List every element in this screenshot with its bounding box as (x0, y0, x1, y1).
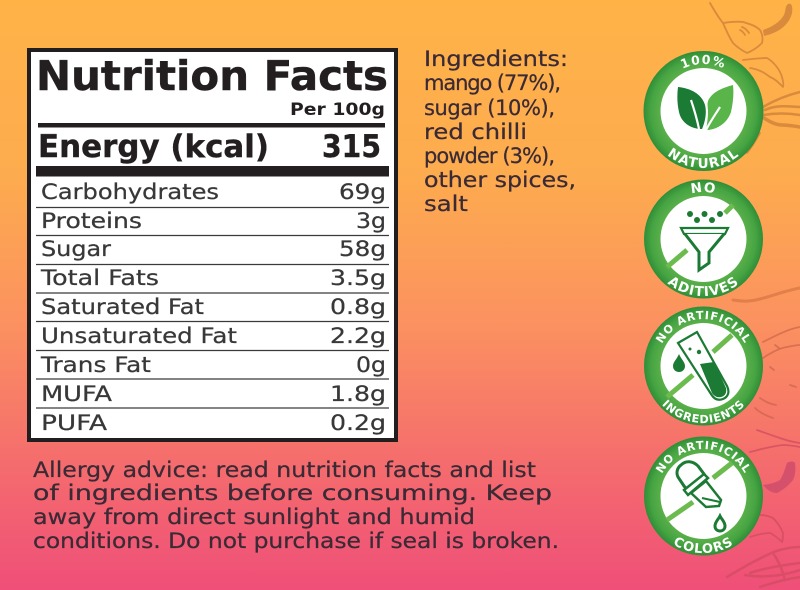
row: total fats: 3.5g (330, 266, 386, 290)
row: saturated fat (41, 295, 386, 319)
row: saturated fat: Saturated Fat (41, 295, 204, 319)
ingredients text block: other spices, (424, 168, 576, 192)
icon: funnel (681, 211, 728, 270)
row: trans fat: Trans Fat (40, 353, 151, 377)
row: sugar: Sugar (41, 237, 111, 261)
slash (667, 463, 732, 520)
ingredients text block: Ingredients: (424, 47, 568, 71)
row: proteins: Proteins (41, 209, 142, 233)
panel background (29, 50, 396, 440)
row: pufa: 0.2g (330, 411, 386, 435)
badge label: ADITIVES (667, 276, 738, 296)
icon: leaves (677, 85, 733, 130)
ingredients text block: salt (424, 192, 468, 216)
row: mufa: 1.8g (330, 382, 386, 406)
row: carbohydrates (41, 180, 386, 204)
row: proteins (41, 209, 386, 233)
row: sugar: 58g (339, 237, 386, 261)
row: mufa (41, 382, 386, 406)
row: trans fat (40, 353, 386, 377)
allergy advice text block: conditions. Do not purchase if seal is broken. (33, 529, 559, 553)
badge: no artificial colors (644, 436, 763, 556)
energy row (38, 129, 381, 165)
badge label: INGREDIENTS (662, 400, 744, 424)
serving size: Per 100g (290, 100, 385, 119)
row: total fats: Total Fats (40, 266, 159, 290)
badge label: NO ARTIFICIAL (656, 440, 750, 473)
row: unsaturated fat (41, 324, 386, 348)
ingredients text block: powder (3%), (424, 144, 555, 168)
badge label (667, 182, 738, 296)
row: proteins: 3g (356, 209, 386, 233)
row: carbohydrates: 69g (339, 180, 386, 204)
decoration: chilli pepper sketches, middle (733, 288, 800, 418)
energy row: Energy (kcal) (38, 129, 269, 165)
badge: 100% natural (644, 51, 764, 171)
decoration: chilli pepper sketches, bottom (727, 430, 800, 587)
panel: nutrition facts (29, 50, 396, 440)
slash (667, 205, 733, 267)
badge label: 100% (680, 54, 724, 68)
ingredients text block (424, 47, 576, 216)
nutrient rows (40, 180, 386, 435)
allergy advice text block: Allergy advice: read nutrition facts and list (33, 458, 536, 482)
icon: test tube (673, 332, 728, 400)
badge: no artificial ingredients (644, 306, 763, 426)
badge label (656, 310, 750, 424)
badge label: COLORS (674, 537, 732, 554)
heading: Nutrition Facts (36, 52, 388, 100)
row: unsaturated fat: 2.2g (330, 324, 386, 348)
badge label: NO (691, 182, 715, 194)
row: sugar (41, 237, 386, 261)
row: pufa: PUFA (41, 411, 108, 435)
badge label: NO ARTIFICIAL (656, 310, 750, 343)
row: pufa (41, 411, 386, 435)
ingredients text block: red chilli (424, 120, 527, 144)
row: carbohydrates: Carbohydrates (41, 180, 219, 204)
allergy advice text block: of ingredients before consuming. Keep (33, 481, 552, 505)
badge label (668, 54, 739, 168)
energy row: 315 (322, 129, 381, 165)
ingredients text block: sugar (10%), (424, 96, 555, 120)
row: trans fat: 0g (356, 353, 386, 377)
slash (667, 335, 732, 397)
allergy advice text block (33, 458, 559, 553)
allergy advice text block: away from direct sunlight and humid (33, 505, 475, 529)
ingredients text block: mango (77%), (424, 71, 561, 95)
badge: no additives (644, 180, 763, 298)
decoration: chilli pepper sketches, top (710, 3, 800, 153)
icon: dropper (677, 462, 725, 531)
row: unsaturated fat: Unsaturated Fat (41, 324, 237, 348)
row: saturated fat: 0.8g (330, 295, 386, 319)
row: mufa: MUFA (41, 382, 113, 406)
row: total fats (40, 266, 386, 290)
badge label (656, 440, 750, 554)
badge label: NATURAL (668, 148, 739, 168)
